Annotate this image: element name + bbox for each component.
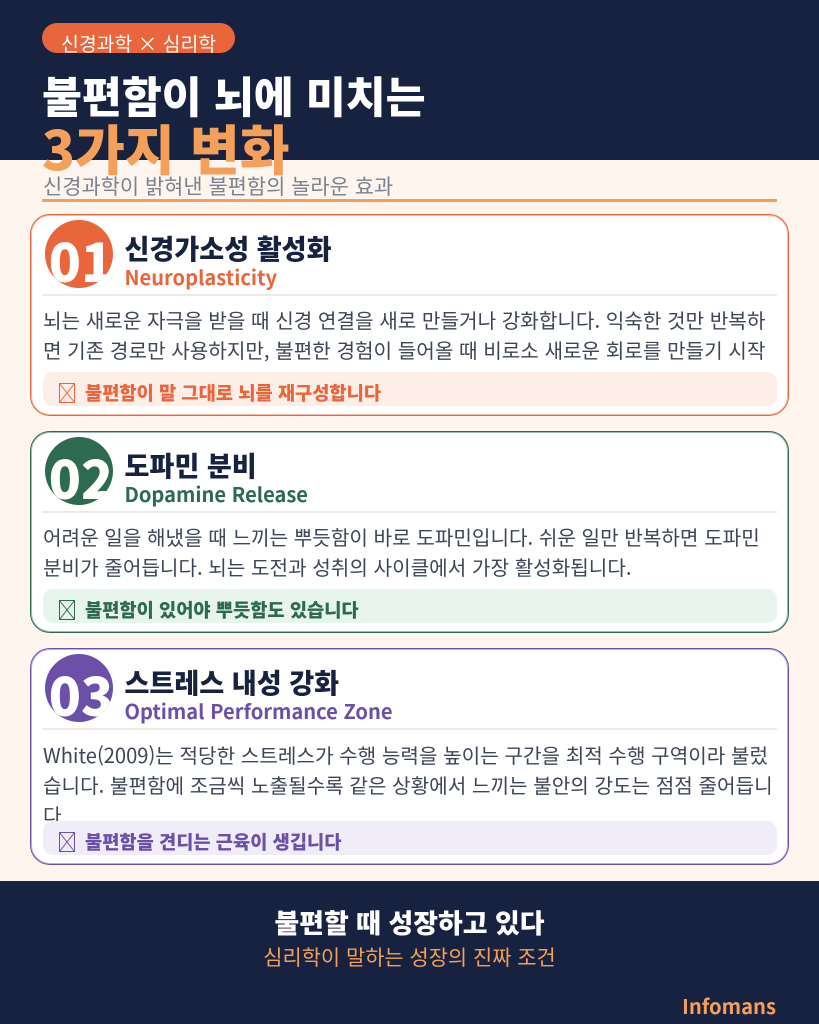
card 1 title: 신경가소성 활성화: [124, 228, 332, 267]
subtitle: 신경과학이 밝혀낸 불편함의 놀라운 효과: [43, 171, 393, 201]
card 3 body text: 다: [43, 800, 62, 829]
icon: missing glyph box: [59, 383, 75, 403]
card 2 body text: 분비가 줄어듭니다. 뇌는 도전과 성취의 사이클에서 가장 활성화됩니다.: [43, 552, 632, 581]
card 1 callout: 불편함이 말 그대로 뇌를 재구성합니다: [85, 379, 381, 406]
header band: [0, 0, 819, 160]
tag pill: [42, 23, 235, 53]
card 2 title: 도파민 분비: [124, 445, 257, 484]
card 1 body text: [43, 305, 765, 364]
card 3 title: 스트레스 내성 강화: [124, 662, 339, 701]
panel: card 1: [30, 214, 789, 416]
card 2 body text: [43, 522, 760, 581]
card 3 callout: 불편함을 견디는 근육이 생깁니다: [85, 828, 341, 855]
subtitle underline: [42, 199, 777, 202]
footer subline: 심리학이 말하는 성장의 진짜 조건: [263, 942, 556, 972]
brand: Infomans: [682, 991, 776, 1020]
card 3 body text: [43, 740, 773, 829]
card 2 body text: 어려운 일을 해냈을 때 느끼는 뿌듯함이 바로 도파민입니다. 쉬운 일만 반복하면 도파민: [43, 522, 760, 551]
icon: missing glyph box: [59, 600, 75, 620]
card 3 body text: White(2009)는 적당한 스트레스가 수행 능력을 높이는 구간을 최적 수행 구역이라 불렀: [43, 740, 768, 769]
card 2 callout: [43, 589, 777, 623]
card 3 callout: [43, 821, 777, 855]
card 2 callout: 불편함이 있어야 뿌듯함도 있습니다: [85, 596, 359, 623]
panel: card 2: [30, 431, 789, 633]
footer headline: 불편할 때 성장하고 있다: [274, 902, 544, 941]
card 3 body text: 습니다. 불편함에 조금씩 노출될수록 같은 상황에서 느끼는 불안의 강도는 점점 줄어듭니: [43, 770, 773, 799]
title line 2: 3가지 변화: [42, 107, 290, 186]
panel: card 3: [30, 648, 789, 865]
card 2 subtitle: Dopamine Release: [124, 479, 308, 508]
card 1 body text: 면 기존 경로만 사용하지만, 불편한 경험이 들어올 때 비로소 새로운 회로를 만들기 시작: [43, 335, 765, 364]
card 1 body text: 뇌는 새로운 자극을 받을 때 신경 연결을 새로 만들거나 강화합니다. 익숙한 것만 반복하: [43, 305, 765, 334]
title line 1: 불편함이 뇌에 미치는: [42, 64, 426, 126]
card 3 subtitle: Optimal Performance Zone: [124, 696, 393, 725]
card 1 subtitle: Neuroplasticity: [124, 262, 277, 291]
card 1 callout: [43, 372, 777, 406]
icon: missing glyph box: [59, 832, 75, 852]
footer band: [0, 881, 819, 1024]
